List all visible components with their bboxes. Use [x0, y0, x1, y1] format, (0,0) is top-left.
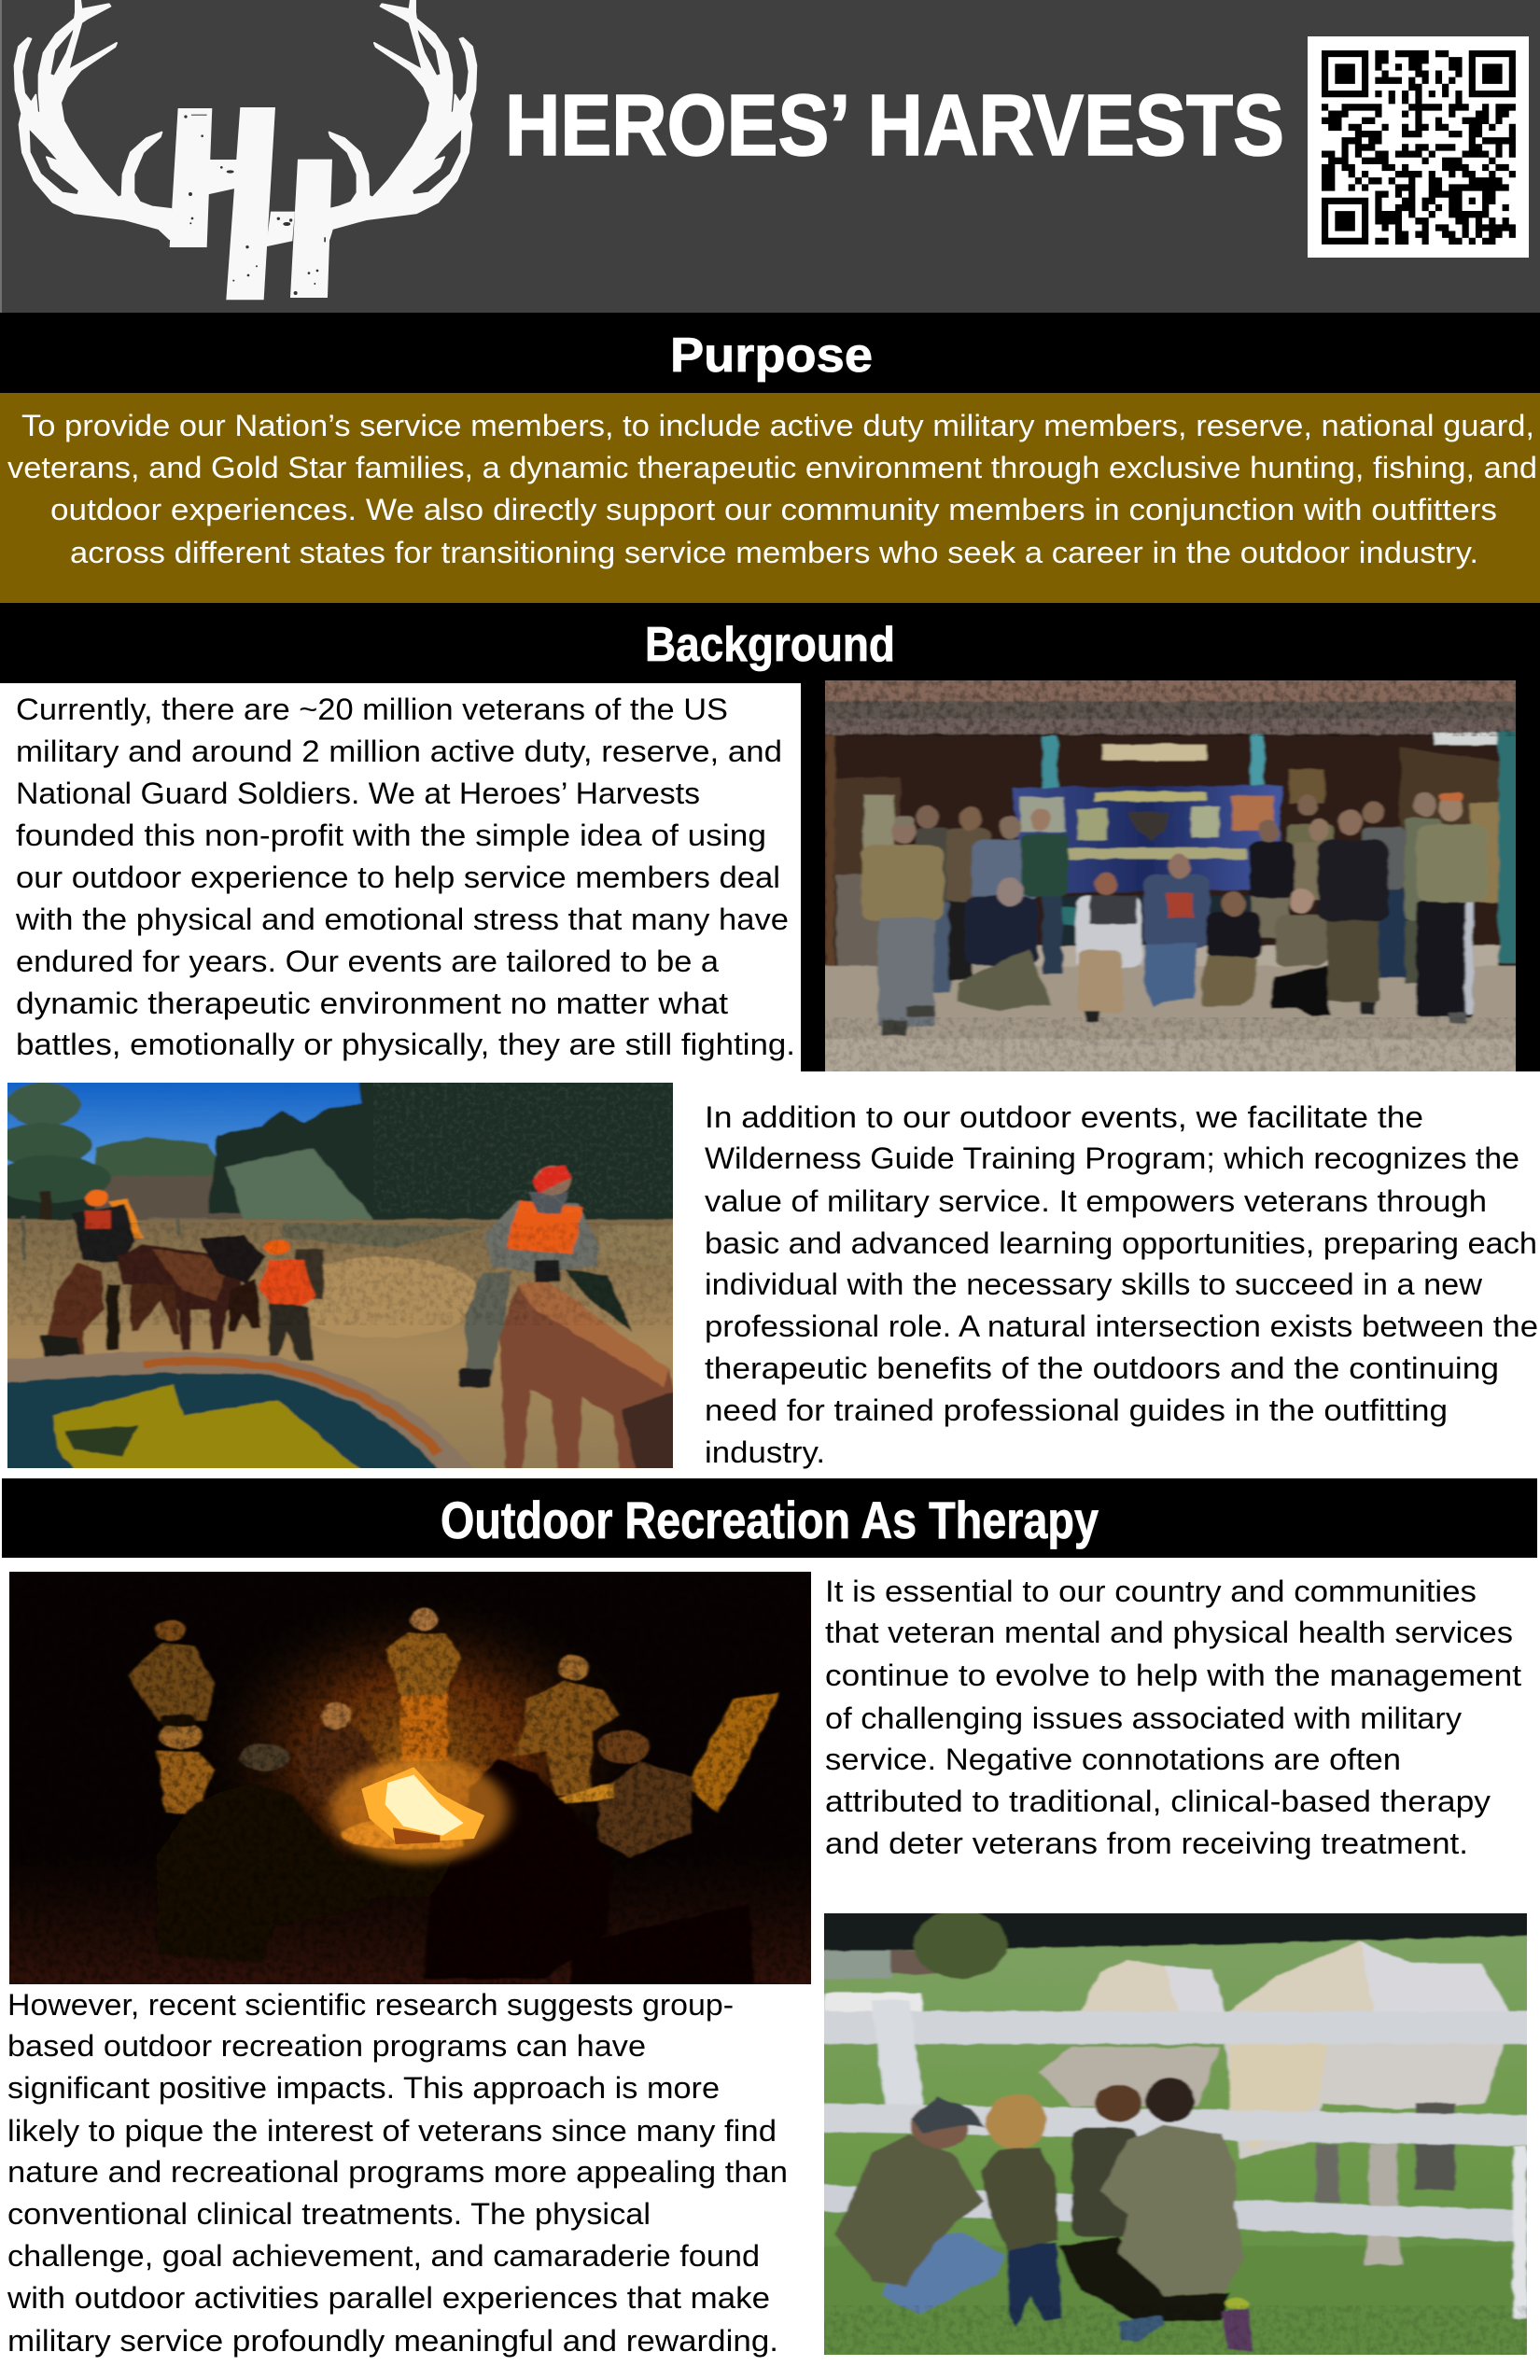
photo: group in front of lodge with banner	[812, 672, 1532, 1080]
photo: riders and horses at water tank	[0, 1073, 695, 1481]
background paragraph one: battles, emotionally or physically, they are still fighting.	[16, 1028, 795, 1061]
background paragraph two: In addition to our outdoor events, we facilitate the	[705, 1100, 1423, 1134]
panel: background	[0, 603, 1540, 1481]
heading: Outdoor Recreation As Therapy: Outdoor Recreation As Therapy	[441, 1491, 1099, 1549]
background paragraph one: endured for years. Our events are tailored to be a	[16, 945, 719, 978]
therapy paragraph two: based outdoor recreation programs can have	[7, 2029, 646, 2063]
photo: family at fence with white horses	[803, 1904, 1540, 2368]
background paragraph one	[15, 693, 795, 1061]
background paragraph one: with the physical and emotional stress that many have	[15, 903, 789, 936]
background paragraph two: value of military service. It empowers veterans through	[705, 1184, 1487, 1218]
therapy paragraph one: continue to evolve to help with the management	[825, 1659, 1521, 1692]
background paragraph one: dynamic therapeutic environment no matter what	[16, 987, 728, 1020]
panel: purpose	[0, 313, 1540, 603]
heading: Background	[0, 603, 1540, 683]
therapy paragraph one: of challenging issues associated with military	[825, 1701, 1462, 1735]
heading: Background: Background	[645, 618, 895, 672]
background paragraph one: founded this non-profit with the simple idea of using	[16, 819, 766, 852]
logo: antlers with HH	[15, 0, 476, 300]
people back row	[916, 828, 953, 903]
right rider and horse	[565, 1269, 632, 1332]
therapy paragraph two: significant positive impacts. This approach is more	[7, 2071, 720, 2105]
family	[882, 2233, 1004, 2315]
background paragraph two: professional role. A natural intersection exists between the	[705, 1309, 1538, 1343]
water tank	[7, 1351, 472, 1468]
therapy paragraph two: nature and recreational programs more appealing than	[7, 2155, 788, 2189]
background paragraph one: Currently, there are ~20 million veterans of the US	[16, 693, 728, 726]
rider one	[108, 1199, 144, 1239]
background paragraph one: National Guard Soldiers. We at Heroes’ Harvests	[16, 777, 700, 810]
therapy paragraph two: However, recent scientific research suggests group-	[7, 1988, 734, 2022]
people front	[861, 845, 944, 921]
purpose text: outdoor experiences. We also directly support our community members in conjunction with outfitters	[50, 493, 1497, 526]
background paragraph two: basic and advanced learning opportunities, preparing each	[705, 1226, 1537, 1260]
therapy paragraph two: with outdoor activities parallel experiences that make	[7, 2281, 770, 2315]
therapy paragraph one: It is essential to our country and communities	[825, 1575, 1477, 1608]
photo: veterans around campfire at night	[6, 1568, 817, 1986]
title: HEROES’ HARVESTS	[505, 77, 1284, 174]
QR code	[1308, 36, 1529, 258]
heading: Outdoor Recreation As Therapy	[2, 1478, 1537, 1558]
center horse	[118, 1244, 244, 1351]
white fence	[803, 2011, 1540, 2044]
background paragraph two: need for trained professional guides in the outfitting	[705, 1393, 1448, 1427]
black frame beside group photo	[801, 683, 1540, 1071]
therapy paragraph one: that veteran mental and physical health services	[825, 1616, 1513, 1649]
therapy paragraph two: military service profoundly meaningful and rewarding.	[7, 2324, 778, 2358]
background paragraph two: therapeutic benefits of the outdoors and the continuing	[705, 1351, 1499, 1385]
therapy paragraph two: likely to pique the interest of veterans since many find	[7, 2114, 777, 2148]
person with pack	[296, 1249, 324, 1299]
background paragraph one: military and around 2 million active duty, reserve, and	[16, 735, 782, 768]
header banner	[0, 0, 1540, 313]
background paragraph one: our outdoor experience to help service members deal	[16, 861, 780, 894]
panel: outdoor recreation as therapy	[2, 1478, 1540, 2368]
background paragraph two: industry.	[705, 1435, 825, 1469]
white horses	[1082, 1960, 1183, 2011]
background paragraph two: Wilderness Guide Training Program; which recognizes the	[705, 1141, 1519, 1175]
background paragraph two: individual with the necessary skills to succeed in a new	[705, 1267, 1483, 1301]
therapy paragraph one: and deter veterans from receiving treatment.	[825, 1827, 1468, 1860]
heading: Purpose: Purpose	[670, 329, 873, 383]
campfire flames	[330, 1757, 508, 1864]
purpose text: across different states for transitioning service members who seek a career in the outdoor industry.	[70, 536, 1478, 569]
therapy paragraph one	[825, 1575, 1521, 1860]
therapy paragraph two: challenge, goal achievement, and camaraderie found	[7, 2239, 760, 2273]
purpose text	[0, 393, 1540, 603]
purpose text: veterans, and Gold Star families, a dynamic therapeutic environment through exclusive hunting, fishing, and	[7, 451, 1537, 484]
therapy paragraph two	[7, 1988, 788, 2358]
heading: Purpose	[0, 313, 1540, 393]
purpose text: To provide our Nation’s service members, to include active duty military members, reserve, national guard,	[21, 409, 1534, 442]
therapy paragraph one: attributed to traditional, clinical-based therapy	[825, 1785, 1491, 1818]
therapy paragraph two: conventional clinical treatments. The physical	[7, 2197, 651, 2231]
background paragraph two	[705, 1100, 1538, 1469]
therapy paragraph one: service. Negative connotations are often	[825, 1743, 1401, 1776]
